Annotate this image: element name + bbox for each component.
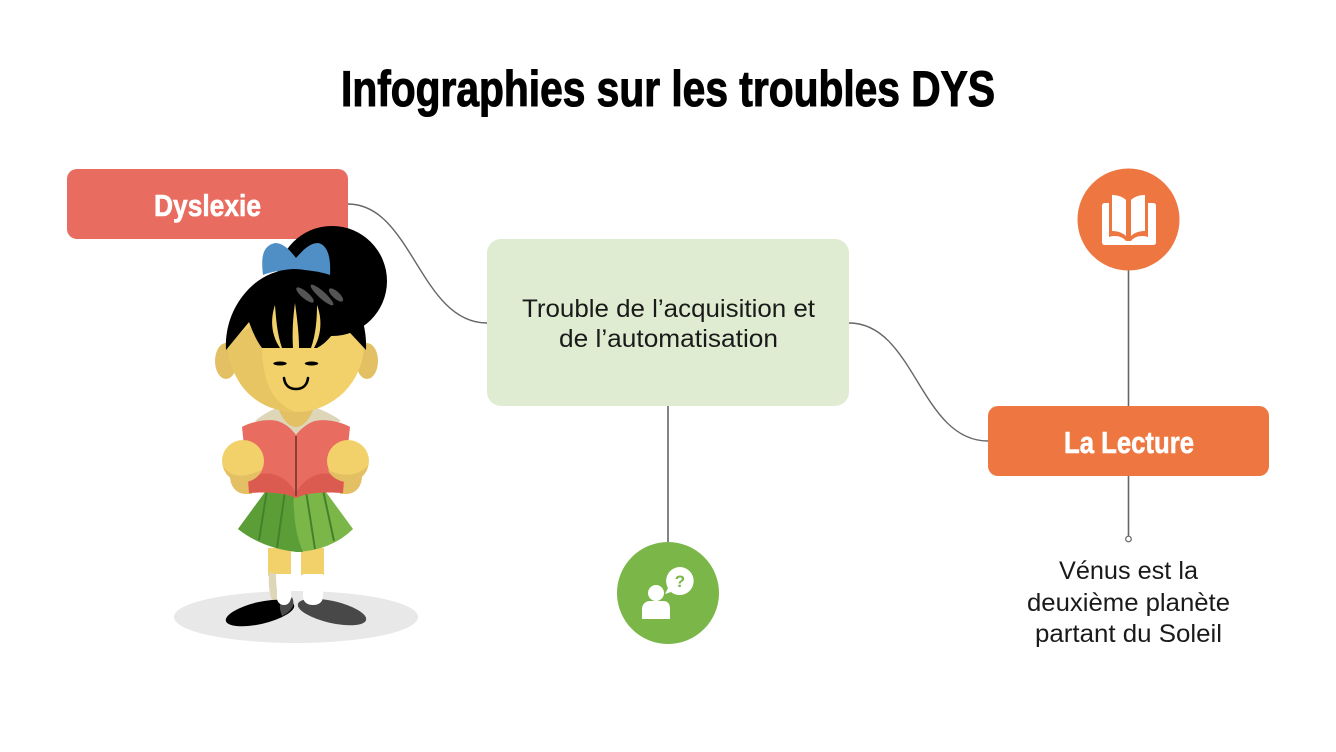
closed eyes [273, 362, 318, 366]
hair fringe [226, 269, 366, 350]
floor shadow [174, 591, 418, 643]
connector: La Lecture to text with end dot [1126, 476, 1131, 542]
icon: open book in orange circle [1078, 168, 1180, 270]
panel: central definition: de l’automatisation [559, 325, 778, 353]
hair highlights [294, 282, 345, 308]
smile [284, 378, 308, 389]
title: Infographies sur les troubles DYS [341, 61, 995, 117]
legs [268, 548, 324, 606]
open book [242, 420, 350, 498]
panel: central definition: Trouble de l’acquisition et [522, 295, 815, 323]
collar [255, 407, 341, 439]
text block: Vénus description [1027, 557, 1230, 648]
hair bow [262, 243, 330, 275]
neck [278, 405, 314, 427]
icon: person with question bubble in green circle [617, 542, 719, 644]
panel: La Lecture label: La Lecture [1064, 425, 1194, 460]
right shoe [295, 593, 369, 631]
text block: Vénus description: deuxième planète [1027, 589, 1230, 617]
panel: La Lecture label [988, 406, 1269, 476]
panel: central definition [487, 239, 849, 406]
hair strands [272, 303, 320, 348]
hands [222, 440, 369, 482]
connector: central box to La Lecture [849, 323, 988, 441]
hair bun [277, 226, 387, 336]
panel: Dyslexie label [67, 169, 348, 239]
text block: Vénus description: Vénus est la [1059, 557, 1198, 585]
connector: book icon to La Lecture [1128, 270, 1130, 406]
illustration: girl reading a book [174, 226, 418, 643]
left shoe [223, 594, 297, 632]
text block: Vénus description: partant du Soleil [1035, 620, 1222, 648]
socks [277, 574, 323, 605]
arms [230, 476, 362, 494]
connector: Dyslexie to central box [348, 204, 487, 323]
icon: person with question bubble in green circle: ? [675, 572, 685, 591]
ears [215, 343, 378, 379]
panel: Dyslexie label: Dyslexie [154, 188, 261, 223]
face [228, 276, 364, 412]
connector: central box to question icon [667, 406, 669, 543]
skirt [238, 486, 353, 552]
